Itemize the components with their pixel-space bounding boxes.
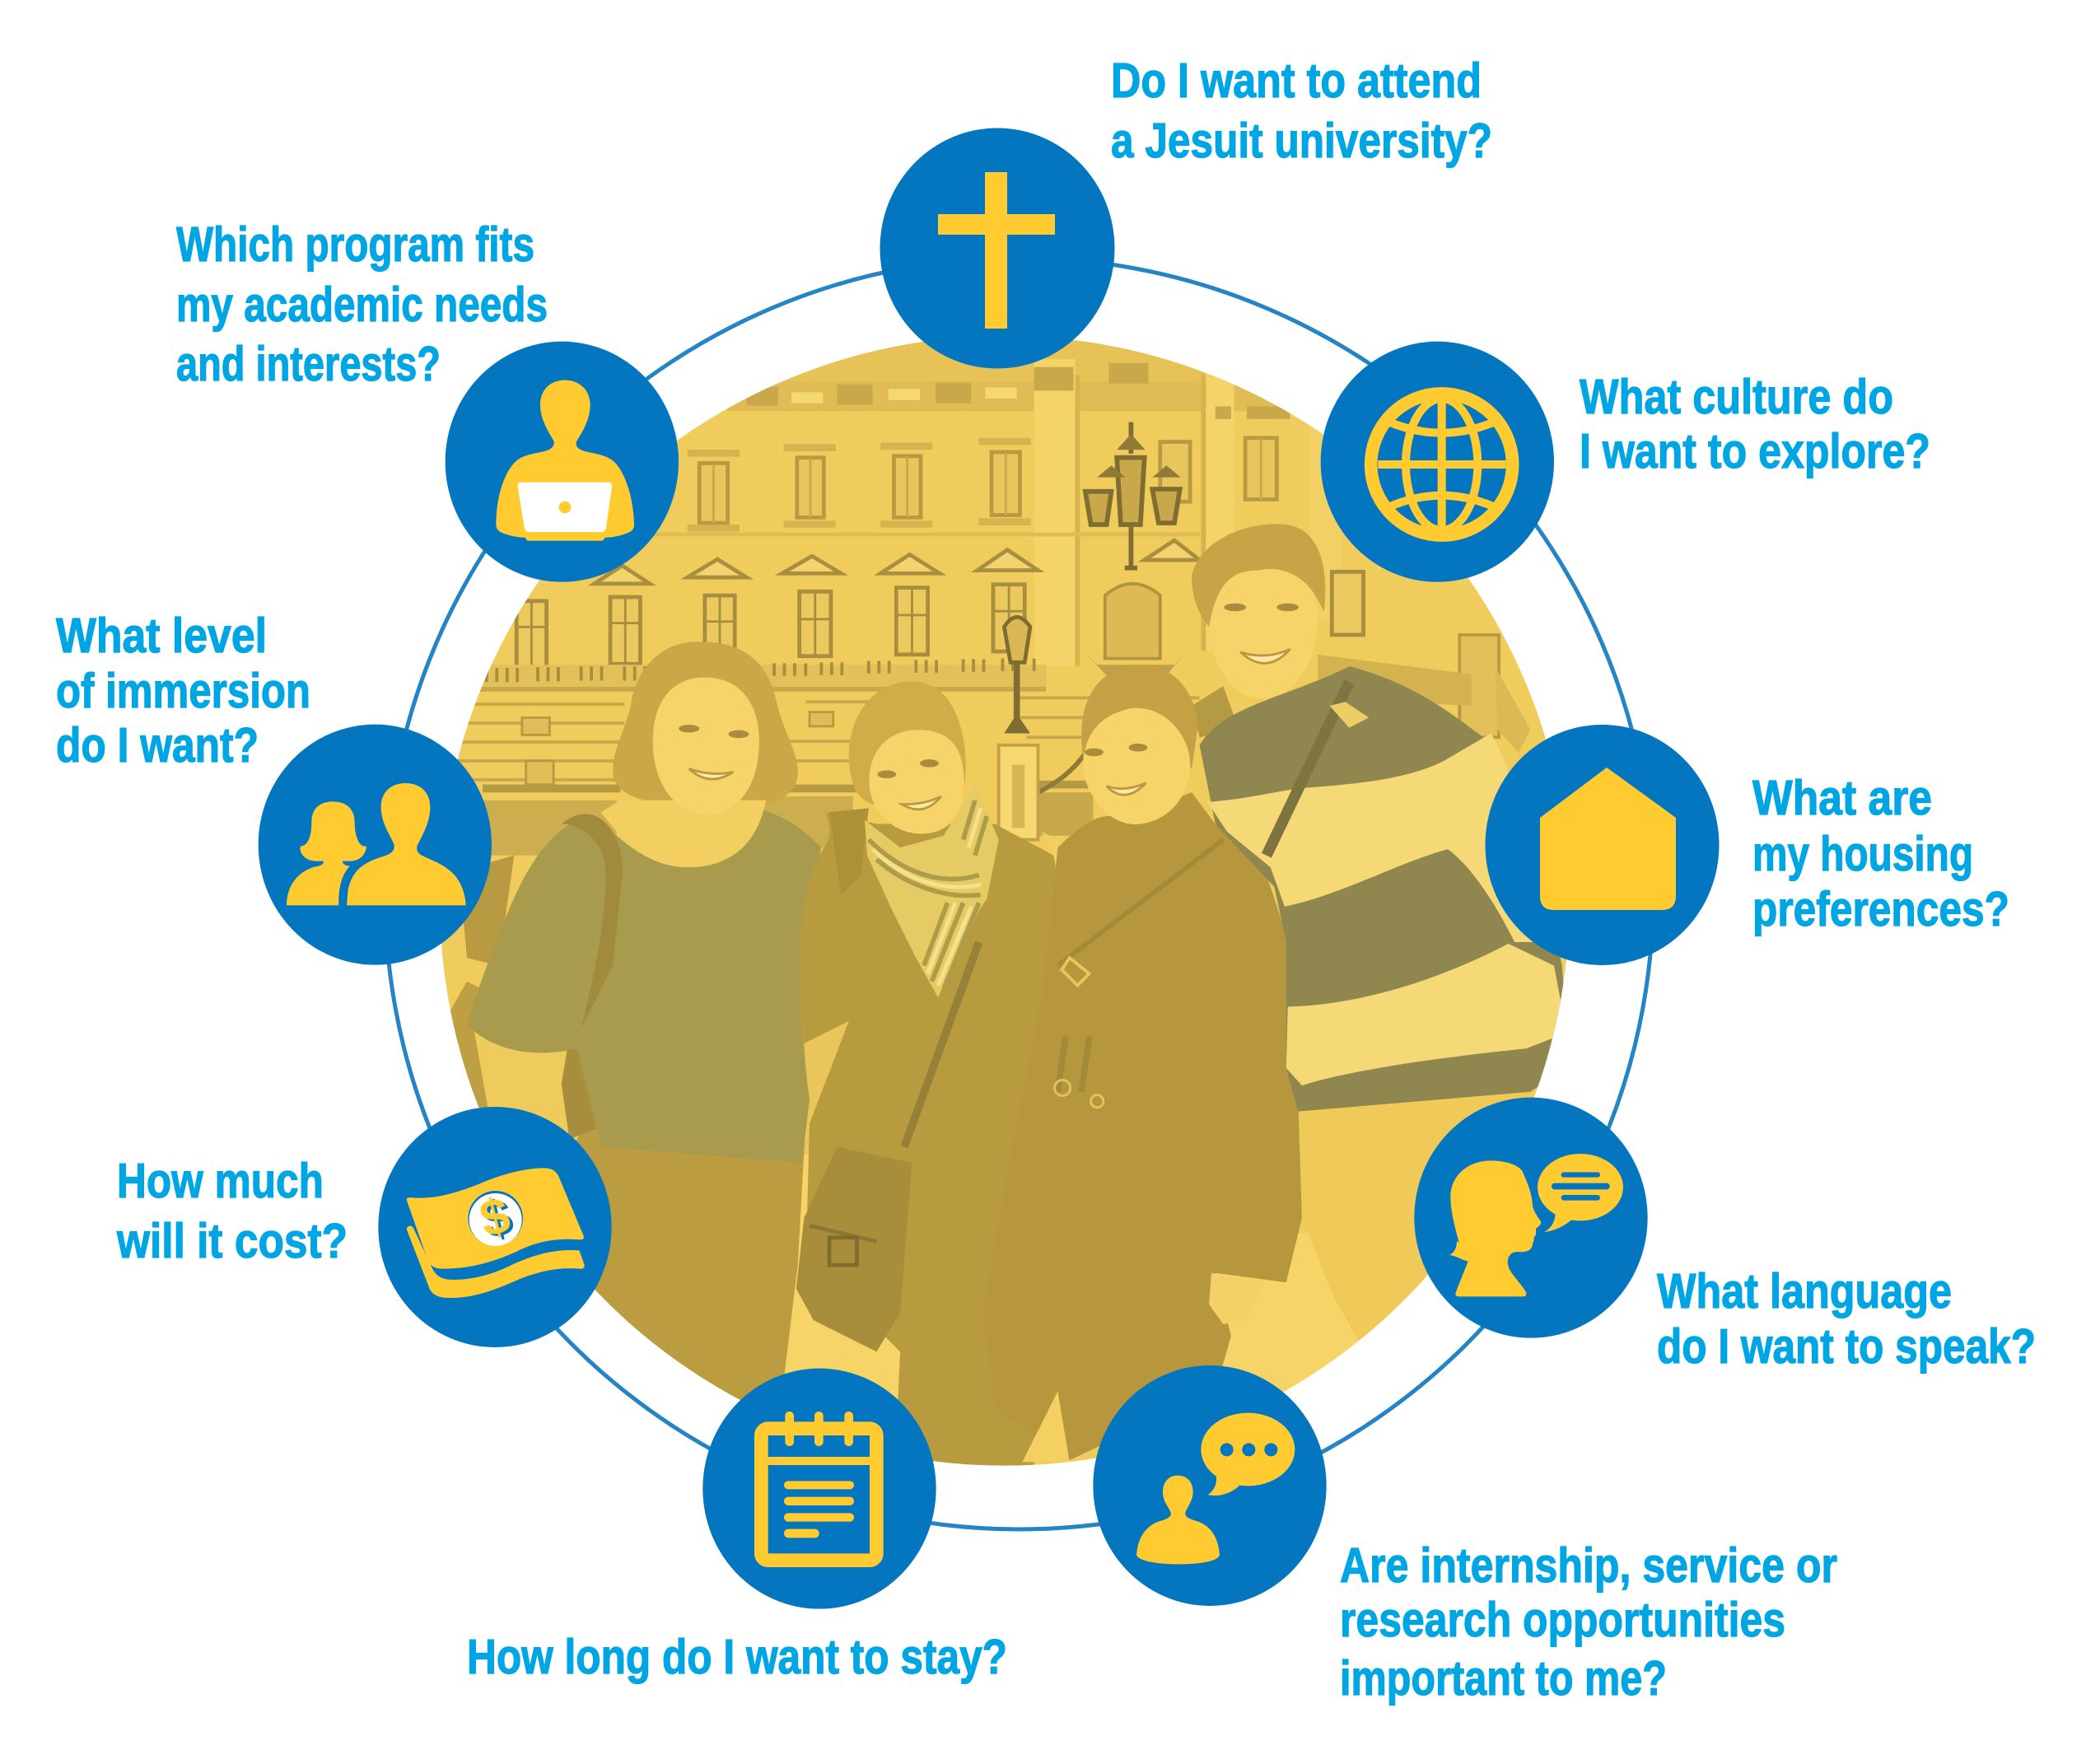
icon badge: cross (880, 128, 1115, 369)
person 3: black coat (1056, 792, 1302, 1461)
icon badge: two people (259, 725, 492, 965)
question: academic program: Which program fits (176, 217, 534, 272)
person 2: bag and strap (904, 942, 979, 1147)
windows row 1 (699, 438, 1276, 523)
icon badge: money (378, 1107, 612, 1347)
question: academic program: and interests? (176, 337, 441, 391)
icon badge: money: $ (474, 1187, 516, 1248)
ring connecting the question icons (385, 258, 1654, 1529)
person 2: striped scarf (865, 785, 999, 997)
iron fence (483, 781, 1093, 856)
question: cost: How much (117, 1154, 324, 1208)
question: duration: How long do I want to stay? (467, 1630, 1007, 1684)
person 4: face and hair (1208, 556, 1318, 698)
question: housing: What are (1752, 771, 1932, 825)
icon badge: house (1486, 725, 1720, 965)
central duotone photo of four students (441, 339, 1566, 1466)
question: Jesuit university: a Jesuit university? (1111, 114, 1492, 168)
question: opportunities: research opportunities (1340, 1593, 1785, 1647)
person 1: bag and arm (450, 982, 483, 1107)
rusticated wall (412, 698, 1200, 780)
question: housing: preferences? (1752, 882, 2009, 936)
question: culture: What culture do (1580, 370, 1893, 424)
question: Jesuit university: Do I want to attend (1111, 54, 1482, 108)
person 4: striped sweater (1200, 666, 1566, 1112)
icon badge: notepad (702, 1369, 936, 1609)
lower lamp (1004, 617, 1030, 662)
question: cost: will it cost? (116, 1214, 348, 1268)
question: language: do I want to speak? (1657, 1319, 2036, 1374)
person 1: hair, neck and face (613, 642, 798, 805)
person 4: trousers (1298, 1092, 1530, 1360)
ornate gate pier (1105, 584, 1160, 659)
question: opportunities: important to me? (1340, 1651, 1667, 1706)
icon badge: globe (1321, 342, 1554, 582)
question: immersion: What level (56, 609, 267, 663)
icon badge: student with laptop (446, 342, 679, 582)
icon badge: head with speech bubble (1414, 1098, 1648, 1338)
icon badge: money: $ (478, 1188, 519, 1250)
person 1: sweater top (467, 810, 821, 1163)
pavement and street (464, 855, 514, 964)
question: culture: I want to explore? (1580, 424, 1930, 478)
question: academic program: my academic needs (176, 278, 548, 332)
person 3: hair and face (1081, 665, 1198, 777)
icon badge: person with speech bubble (1093, 1365, 1327, 1606)
left student lower body (464, 1066, 805, 1400)
pediments (595, 540, 1200, 584)
balustrade (478, 665, 1046, 687)
gap between legs (1022, 1391, 1070, 1462)
question: opportunities: Are internship, service or (1340, 1538, 1837, 1593)
question: immersion: do I want? (56, 718, 259, 772)
windows row 2 (516, 572, 1364, 668)
palace upper storey (412, 335, 1647, 856)
upper triple lamp (1085, 422, 1180, 568)
person 3: hand on shoulder (1042, 832, 1054, 857)
question: language: What language (1657, 1264, 1952, 1318)
question: immersion: of immersion (56, 664, 310, 718)
question: housing: my housing (1752, 827, 1973, 881)
person 2: hair and face (849, 681, 966, 805)
person 3: hand (1209, 1273, 1228, 1324)
person 2: dark coat (800, 812, 1056, 1466)
